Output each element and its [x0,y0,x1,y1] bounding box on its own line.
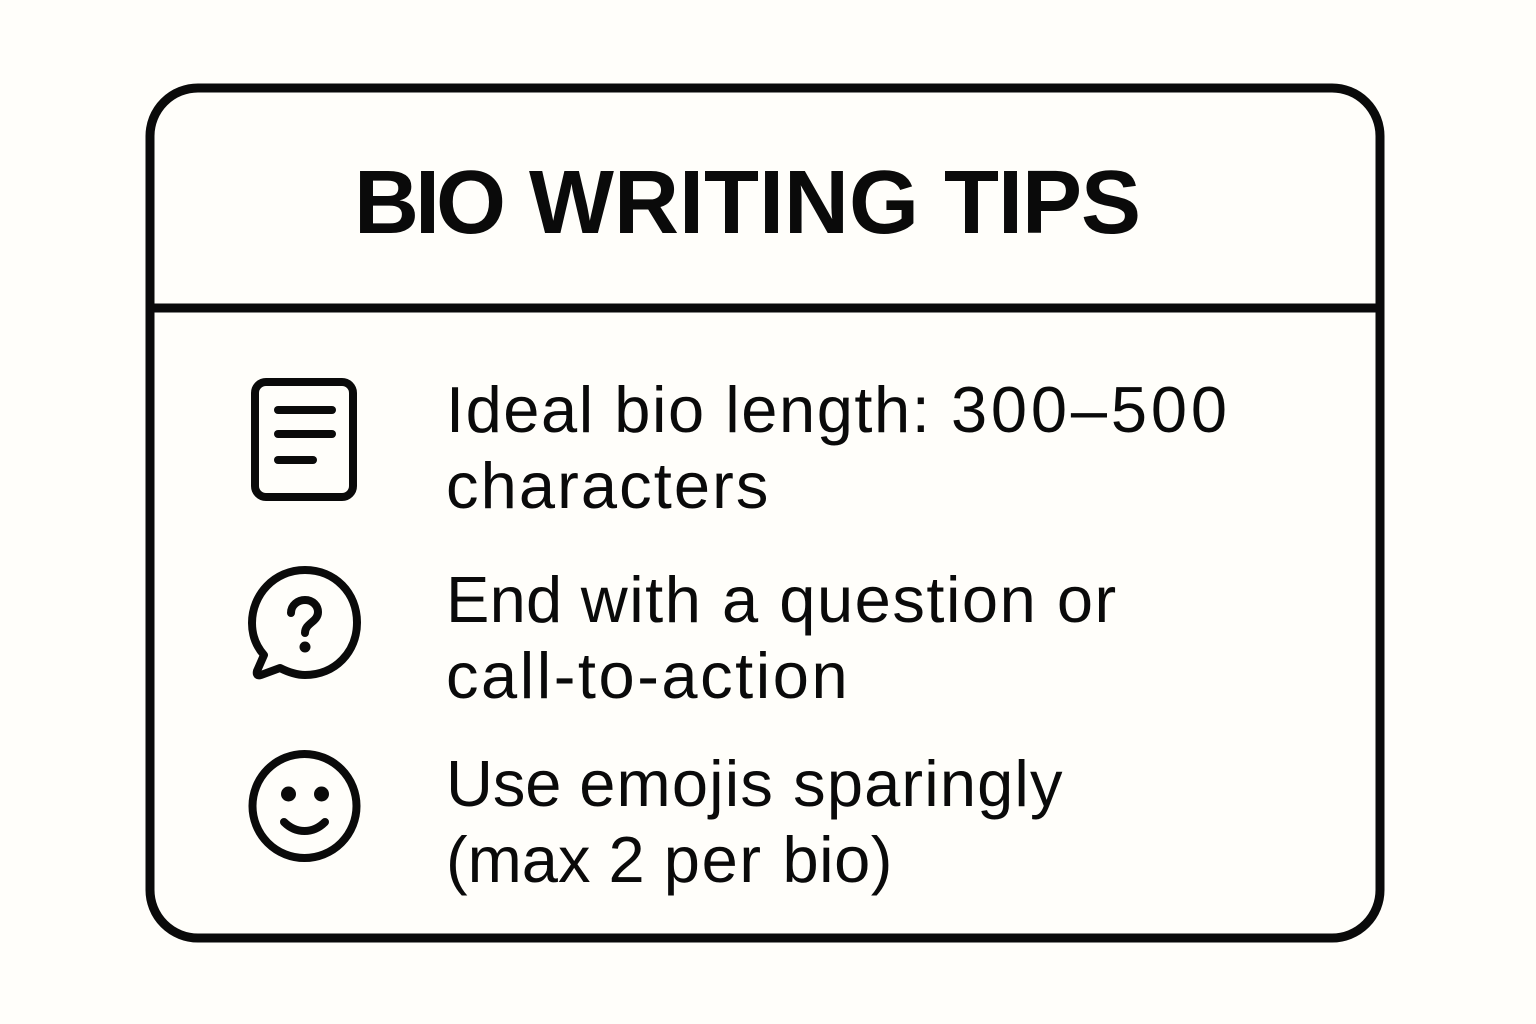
icon: smiley face [252,754,356,858]
tip 1 text [446,373,1231,522]
tip 1 text: Ideal bio length: 300–500 [446,373,1231,446]
tip 1 text: characters [446,449,770,522]
tip 2 text [446,563,1118,712]
tip 3 text: (max 2 per bio) [446,823,893,896]
tip 2 text: call-to-action [446,639,850,712]
icon: document [255,382,353,497]
tip 3 text: Use emojis sparingly [446,747,1064,820]
icon: question speech bubble [252,570,357,675]
tip 2 text: End with a question or [446,563,1118,636]
tip 3 text [446,747,1064,896]
title: BIO WRITING TIPS [354,153,1140,253]
